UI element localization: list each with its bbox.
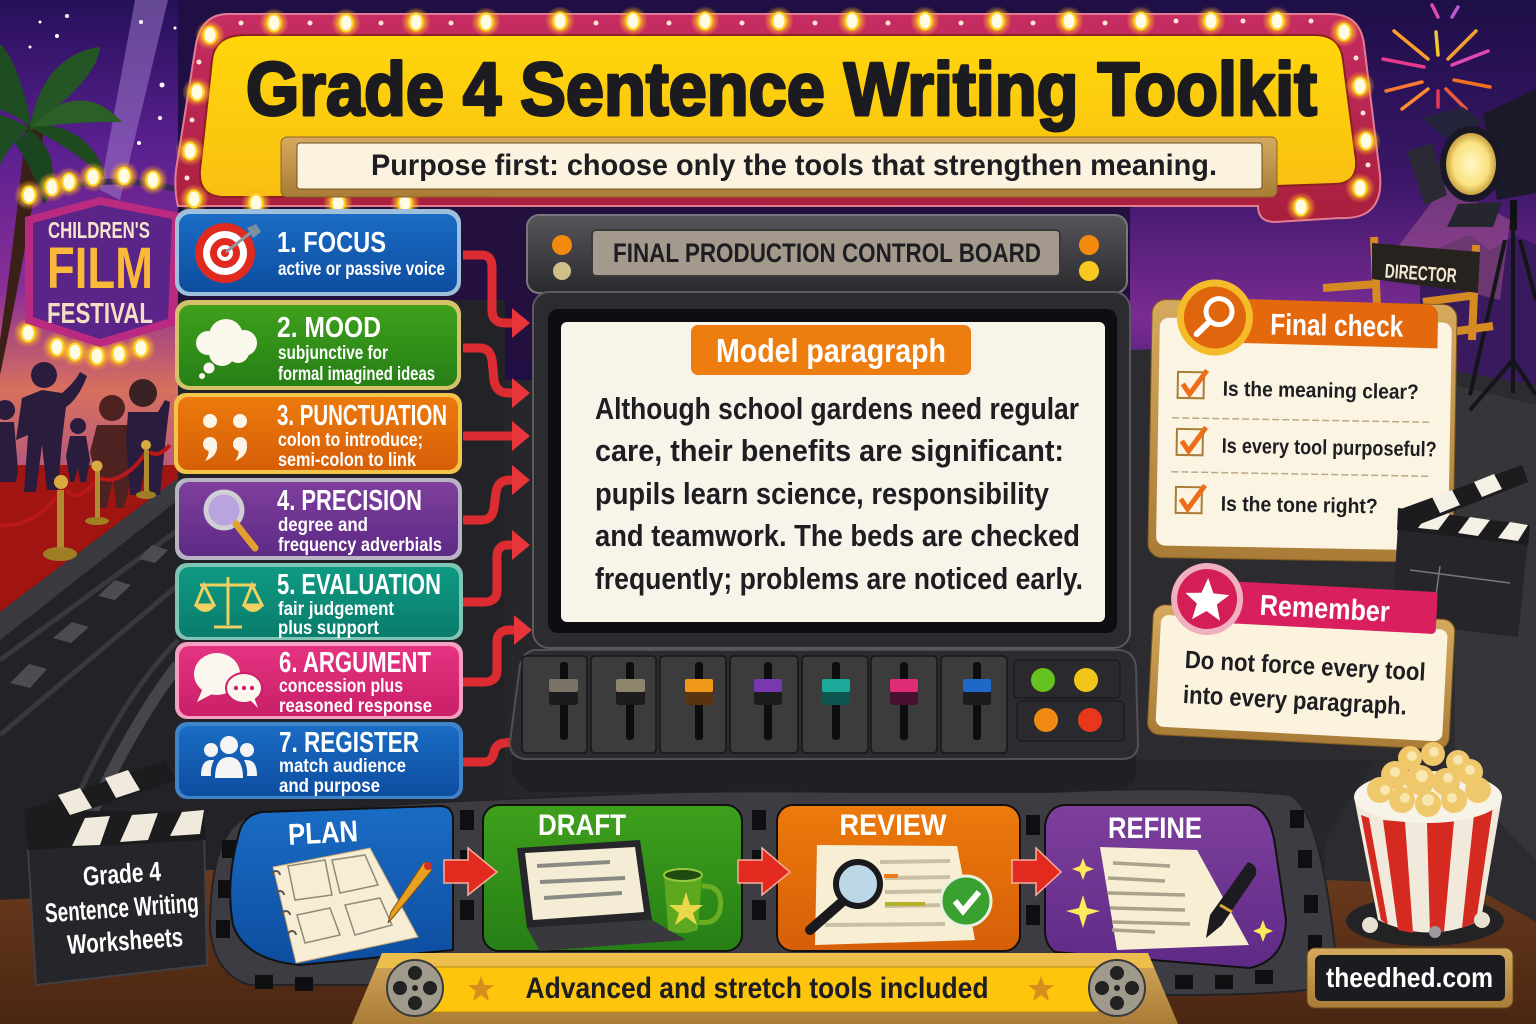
remember text [1182,646,1426,721]
crowd silhouettes [0,362,170,508]
arrow heads [512,308,532,645]
remember banner [1228,581,1438,634]
control board header [527,215,1127,293]
checklist [1171,370,1438,519]
tool card 7: register: 7. REGISTER [279,727,419,759]
fireworks [1383,5,1490,109]
icon: sparkles [1066,858,1273,942]
clapperboard right [1392,465,1530,637]
left clapperboard: Grade 4 [82,856,162,892]
tool card 2: mood: subjunctive for [278,343,388,364]
festival sign [25,197,180,347]
background: festival sky [0,0,178,500]
spotlight [1380,89,1536,410]
bottom banner: Advanced and stretch tools included [526,972,988,1005]
tool card 5: evaluation [175,563,463,640]
tool card 4: precision: frequency adverbials [278,535,442,556]
icon: green mug [664,869,721,933]
tool card 2: mood: 2. MOOD [277,312,381,344]
final check panel [1148,278,1458,563]
icon: laptop [517,840,686,951]
stage draft [483,805,742,951]
tool card 2: mood: formal imagined ideas [278,364,435,385]
red carpet [0,465,178,612]
rope barriers [0,440,170,561]
left clapperboard [24,760,207,985]
title text: Grade 4 Sentence Writing Toolkit [246,47,1317,131]
icon: storyboard notebook [272,848,432,963]
checklist: Is the tone right? [1220,493,1378,518]
remember text: into every paragraph. [1182,681,1407,721]
model paragraph text: Although school gardens need regular [595,391,1079,426]
icon: magnifier badge [1176,279,1254,356]
director chair: DIRECTOR [1384,261,1458,288]
tool card 7: register: and purpose [279,776,380,797]
tool card 2: mood [175,300,461,390]
icon: colon and semi-colon [203,414,247,461]
subtitle bar: Purpose first: choose only the tools that strengthen meaning. [371,149,1217,182]
website badge: theedhed.com [1326,962,1493,993]
tool card 1: focus: active or passive voice [278,259,445,280]
final check banner: Final check [1270,308,1404,344]
stage refine [1045,805,1286,968]
tool card 6: argument: 6. ARGUMENT [279,647,431,679]
festival sign: FESTIVAL [47,298,153,330]
stage plan: PLAN [287,815,359,852]
control board header: FINAL PRODUCTION CONTROL BOARD [613,238,1041,268]
filmstrip [210,789,1336,995]
icon: document with pen [1100,847,1256,950]
final check banner [1241,299,1438,348]
checklist: Is every tool purposeful? [1222,435,1437,461]
subtitle bar [281,137,1277,197]
tool card 5: evaluation: plus support [278,618,380,639]
model paragraph badge [691,325,971,375]
left clapperboard: Worksheets [66,922,184,960]
fader knobs [549,679,991,705]
stage refine: REFINE [1108,812,1202,845]
icon: star badge [1169,561,1245,637]
icon: film reel right [1089,960,1145,1016]
festival light arch [13,161,178,371]
title marquee [175,6,1381,222]
icon: balance scale [196,577,262,627]
icon: document with magnifier [810,845,991,945]
tool card 6: argument: reasoned response [279,696,432,717]
tool card 6: argument: concession plus [279,676,403,697]
marquee bulbs [175,6,1381,222]
stage plan [230,806,453,965]
tool card 4: precision: degree and [278,515,368,536]
icon: stars [468,976,1054,1001]
website badge [1307,948,1513,1008]
festival sign: FILM [47,236,153,301]
model paragraph text: frequently; problems are noticed early. [595,561,1083,596]
director chair [1323,237,1493,340]
icon: thought cloud [196,319,257,379]
model paragraph text [595,391,1083,596]
tool card 5: evaluation: fair judgement [278,599,395,620]
stage review [777,805,1020,951]
tool card 4: precision: 4. PRECISION [277,485,422,517]
model paragraph text: pupils learn science, responsibility [595,476,1050,511]
tool card 3: punctuation: colon to introduce; [278,430,423,451]
bottom banner [352,953,1178,1024]
icon: group of people [201,736,257,778]
indicator lights [1014,660,1124,741]
tool card 3: punctuation: semi-colon to link [278,450,416,471]
checklist: Is the meaning clear? [1223,378,1419,404]
model paragraph text: care, their benefits are significant: [595,433,1064,468]
tool card 4: precision [175,478,462,560]
tool card 3: punctuation [174,393,462,474]
stage draft: DRAFT [538,809,626,842]
icon: film reel left [387,960,443,1016]
tool card 1: focus: 1. FOCUS [277,227,386,259]
tool card 3: punctuation: 3. PUNCTUATION [277,400,447,432]
festival sign: CHILDREN'S [48,217,150,243]
process arrows [444,848,1061,895]
tool card 5: evaluation: 5. EVALUATION [277,569,441,601]
stage review: REVIEW [840,809,947,842]
model paragraph text: and teamwork. The beds are checked [595,518,1080,553]
monitor [533,292,1130,648]
arrows from tools to screen [463,255,520,762]
left clapperboard: Sentence Writing [44,888,200,928]
tool card 1: focus [175,209,461,296]
tool card 6: argument [175,642,463,719]
tool card 7: register: match audience [279,756,406,777]
icon: target [195,223,261,283]
remember banner: Remember [1259,590,1390,629]
palm tree [0,44,122,375]
remember text: Do not force every tool [1184,646,1426,687]
icon: magnifying glass [206,492,255,548]
road with lane markers [0,478,178,900]
popcorn bucket [1346,742,1504,946]
mixer console [510,650,1138,792]
tool card 7: register [175,722,463,799]
model paragraph badge: Model paragraph [716,332,946,369]
icon: speech bubbles [194,653,262,708]
remember panel [1147,560,1458,750]
